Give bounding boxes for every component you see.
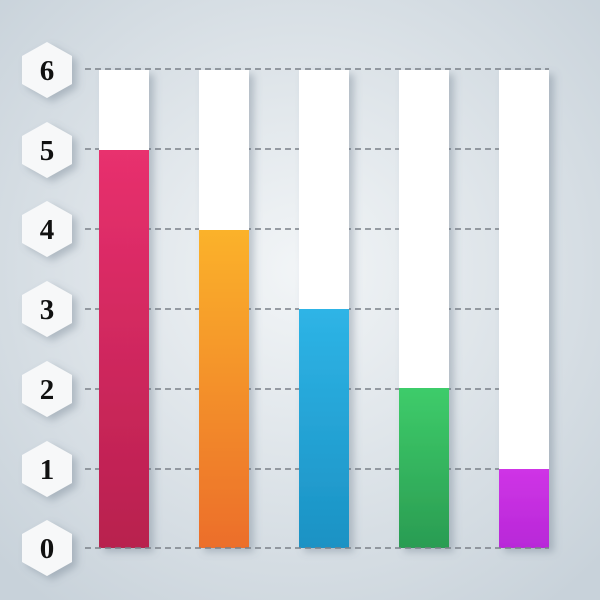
hex 5 bbox=[22, 122, 72, 178]
hex 6: 6 bbox=[40, 55, 54, 87]
bar: 4 bbox=[199, 70, 249, 548]
hex 1 bbox=[22, 441, 72, 497]
hex 6 bbox=[22, 42, 72, 98]
bar: 1 bbox=[499, 70, 549, 548]
bar chart bbox=[99, 70, 549, 548]
y axis hexagon labels bbox=[22, 42, 72, 576]
bar: 2 bbox=[399, 70, 449, 548]
hex 4: 4 bbox=[40, 214, 54, 246]
hex 0: 0 bbox=[40, 533, 54, 565]
hex 3 bbox=[22, 281, 72, 337]
bar: 5 bbox=[99, 70, 149, 548]
hex 0 bbox=[22, 520, 72, 576]
hex 2: 2 bbox=[40, 374, 54, 406]
bar: 3 bbox=[299, 70, 349, 548]
hex 2 bbox=[22, 361, 72, 417]
hex 4 bbox=[22, 201, 72, 257]
hex 1: 1 bbox=[40, 454, 54, 486]
hex 5: 5 bbox=[40, 135, 54, 167]
hex 3: 3 bbox=[40, 294, 54, 326]
